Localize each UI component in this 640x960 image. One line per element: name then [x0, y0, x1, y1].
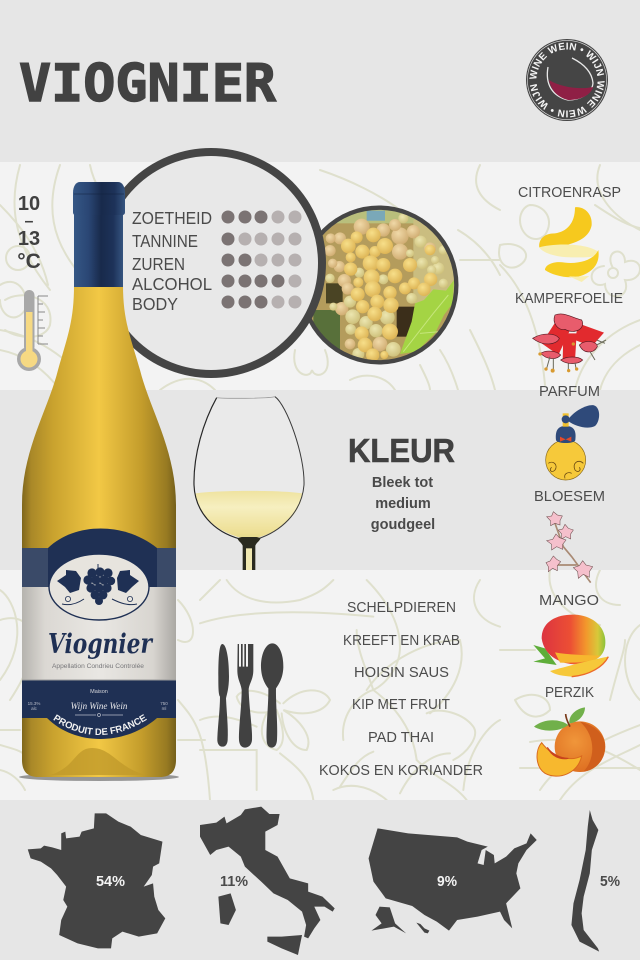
share: France: 54%: [96, 874, 125, 890]
tasting label list: ZUREN: [132, 254, 185, 274]
share: Italy: 11%: [220, 874, 248, 890]
label crest: [49, 554, 149, 620]
label volume: 750: [160, 701, 168, 706]
food pairing list: [319, 599, 483, 779]
food pairing list: PAD THAI: [368, 729, 434, 746]
logo badge: WINE WEIN • WIJN WINE WEIN • WIJN: [529, 42, 605, 118]
label maison: Maison: [90, 689, 108, 695]
aroma labels: CITROENRASP: [518, 184, 621, 201]
icon: perfume bottle: [546, 405, 599, 480]
aroma labels: BLOESEM: [534, 488, 605, 505]
label slogan: PRODUIT DE FRANCE: [53, 714, 147, 735]
label appellation: Appellation Condrieu Controlée: [52, 663, 144, 670]
map: United States: [369, 828, 537, 933]
icon: peach: [534, 707, 605, 776]
temperature text: [17, 193, 41, 273]
tasting label list: BODY: [132, 294, 178, 314]
temperature text: –: [25, 213, 34, 230]
wine bottle: [19, 182, 179, 781]
map: Chile: [571, 810, 599, 952]
title: VIOGNIER: [19, 54, 277, 114]
food pairing list: KREEFT EN KRAB: [343, 632, 460, 649]
temperature text: 10: [18, 193, 40, 215]
map: France: [28, 813, 165, 948]
panel: title band: [0, 0, 640, 162]
label abv: alc: [31, 706, 38, 711]
rating dots: [222, 210, 302, 308]
bottle punt: [50, 748, 146, 775]
fork: [237, 644, 253, 748]
food pairing list: HOISIN SAUS: [354, 664, 449, 681]
colour description: goudgeel: [371, 517, 435, 533]
food pairing list: SCHELPDIEREN: [347, 599, 456, 616]
temperature text: °C: [17, 250, 41, 273]
colour description: Bleek tot: [372, 475, 433, 491]
tasting label list: ZOETHEID: [132, 208, 212, 228]
share: United States: 9%: [437, 874, 457, 890]
tasting label list: TANNINE: [132, 231, 198, 251]
panel: tasting profile circle: [100, 152, 322, 374]
knife: [217, 644, 229, 747]
map: Italy: [200, 807, 335, 955]
icon: cutlery: [217, 643, 283, 748]
label abv: 15.3%: [28, 701, 40, 706]
grape photo circle: [300, 207, 460, 367]
aroma labels: PERZIK: [545, 684, 594, 701]
icon: lemon zest: [539, 207, 599, 282]
panel: profile band: [0, 162, 640, 390]
spoon: [261, 643, 283, 748]
colour heading: KLEUR: [348, 432, 455, 469]
panel: colour band: [0, 390, 640, 570]
colour description: [371, 475, 435, 533]
icon: thermometer: [17, 290, 48, 371]
panel: food pairing band: [0, 570, 640, 800]
aroma labels: MANGO: [539, 592, 599, 609]
panel: origin band: [0, 800, 640, 960]
tasting label list: [132, 208, 212, 314]
icon: honeysuckle: [533, 314, 606, 373]
aroma labels: PARFUM: [539, 383, 600, 400]
label wine name: Viognier: [48, 629, 153, 660]
tasting label list: ALCOHOL: [132, 274, 212, 294]
aroma labels: KAMPERFOELIE: [515, 290, 623, 307]
label producer: Wijn Wine Wein: [71, 701, 128, 711]
origin maps: [28, 807, 620, 955]
icon: mango: [533, 615, 608, 677]
food pairing list: KIP MET FRUIT: [352, 696, 450, 713]
food pairing list: KOKOS EN KORIANDER: [319, 762, 483, 779]
temperature text: 13: [18, 228, 40, 250]
wine glass: [194, 397, 304, 570]
bottle label: [22, 528, 176, 739]
bottle capsule: [73, 182, 125, 287]
icon: blossom branch: [546, 512, 593, 583]
share: Chile: 5%: [600, 874, 620, 890]
label volume: ml: [162, 706, 166, 711]
aroma labels: [515, 184, 623, 701]
colour description: medium: [375, 496, 431, 512]
